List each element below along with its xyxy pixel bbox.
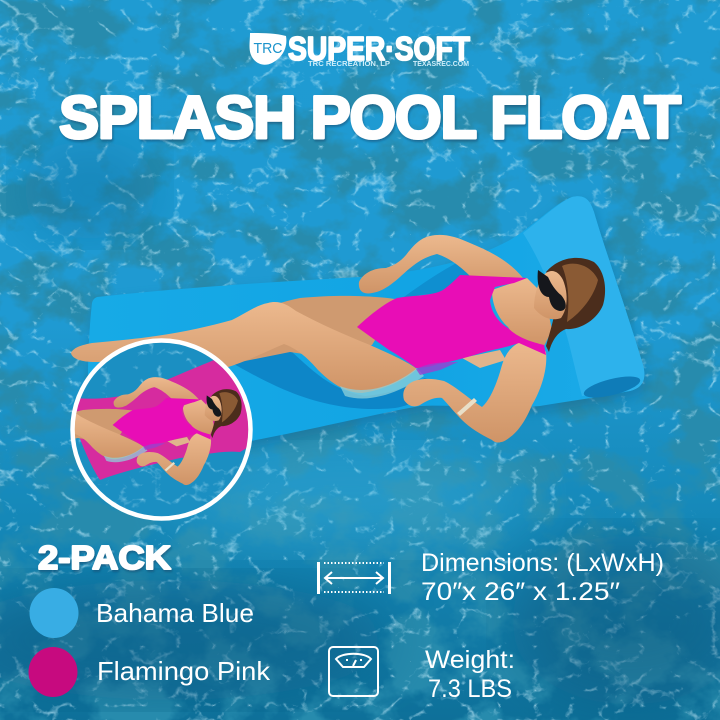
colour option: Bahama Blue	[30, 588, 254, 638]
logo icon: TRC drop: TRC	[254, 40, 283, 57]
title: SPLASH POOL FLOAT	[59, 84, 681, 151]
text: dimensions: 70″x 26″ x 1.25′′	[421, 578, 620, 606]
icon: weighing scale	[329, 647, 378, 696]
colour option: Flamingo Pink: Flamingo Pink	[97, 656, 271, 686]
text: dimensions: Dimensions: (LxWxH)	[421, 549, 664, 577]
colour option: Bahama Blue: Bahama Blue	[96, 598, 254, 628]
text: dimensions	[421, 549, 664, 606]
logo url: TEXASREC.COM	[413, 61, 469, 68]
text: weight: 7.3 LBS	[428, 675, 512, 703]
pool float: Bahama Blue	[88, 196, 646, 448]
inset: Flamingo Pink float	[70, 338, 253, 521]
colour option: Flamingo Pink	[28, 647, 271, 697]
logo icon: TRC drop	[250, 33, 286, 65]
text: weight: Weight:	[425, 646, 515, 674]
float shadow on mat	[230, 349, 440, 409]
text: weight	[425, 646, 515, 703]
logo small print: TRC RECREATION, LP	[308, 61, 390, 68]
float pillow roll	[523, 196, 644, 396]
woman on the blue float	[71, 235, 605, 442]
logo wordmark: SUPER·SOFT	[288, 30, 470, 67]
icon: dimensions arrow	[318, 562, 390, 594]
heading: 2-pack: 2-PACK	[38, 539, 171, 576]
logo: TRC Super-Soft	[250, 30, 470, 68]
